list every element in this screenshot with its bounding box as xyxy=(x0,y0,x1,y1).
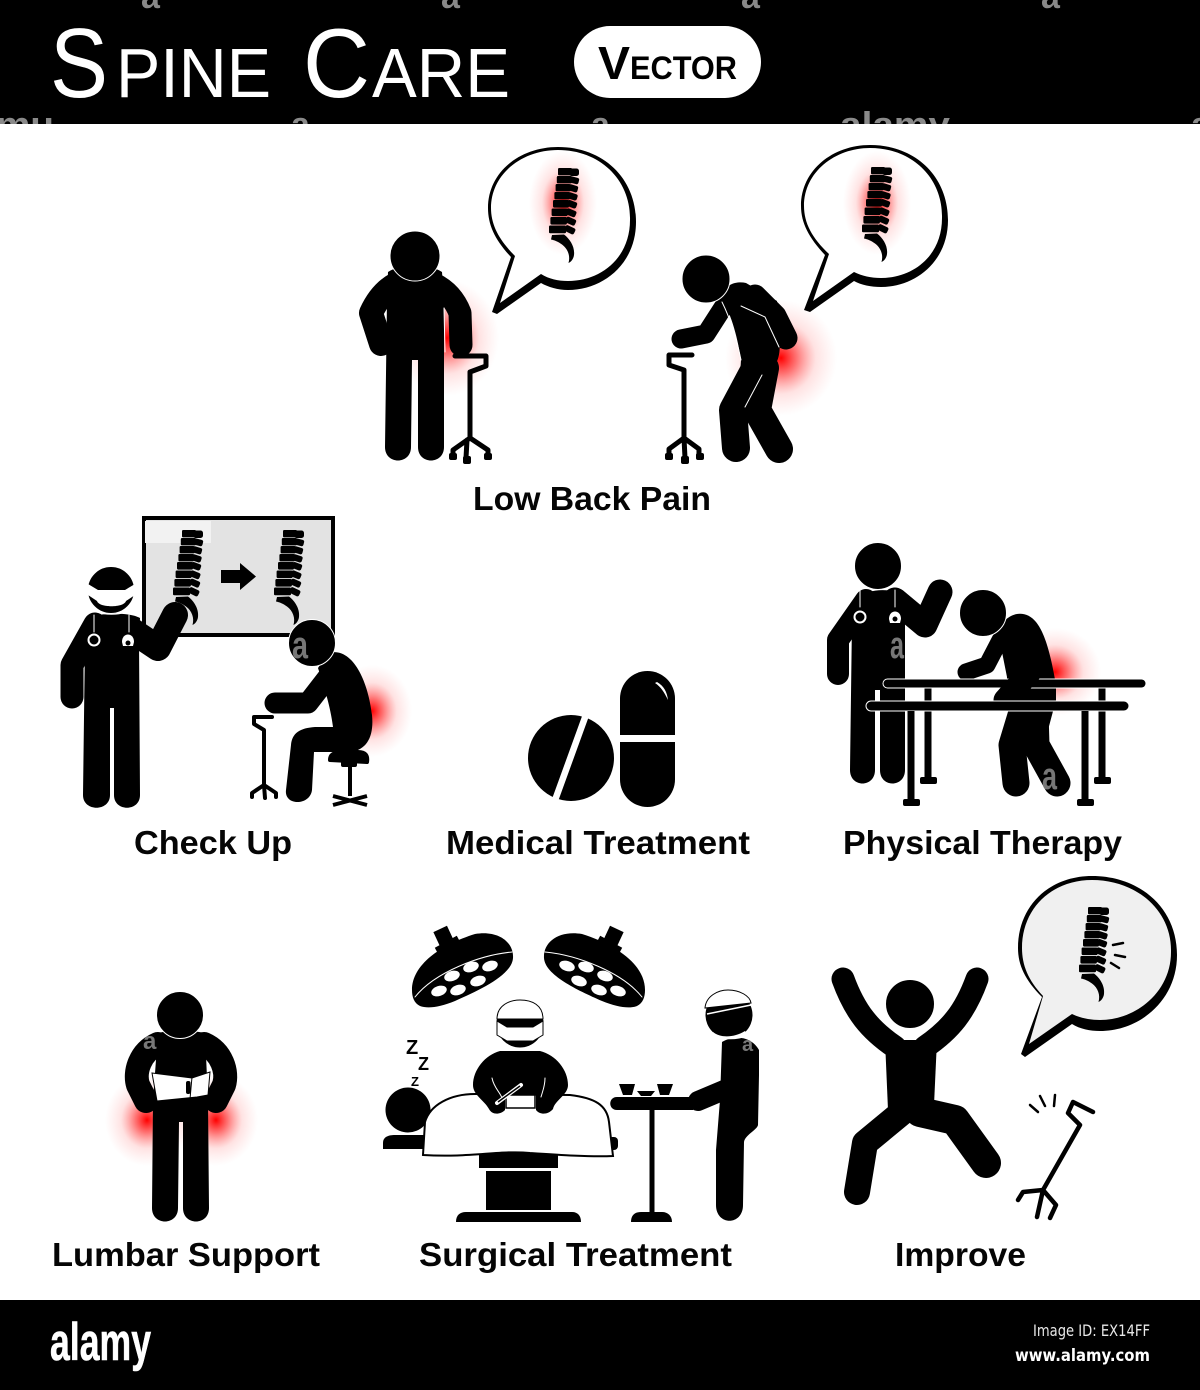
icon: tablet xyxy=(528,712,614,803)
vector badge: V xyxy=(598,37,630,89)
doctor with mask xyxy=(72,566,175,808)
therapist xyxy=(838,542,940,784)
footer band xyxy=(0,1300,1200,1390)
panel: surgical treatment xyxy=(383,926,759,1273)
vector badge: ECTOR xyxy=(630,50,737,86)
label: medical treatment: Medical Treatment xyxy=(446,824,750,861)
logo: alamy xyxy=(50,1313,151,1372)
icon: arrow xyxy=(221,563,256,590)
standing patient with cane xyxy=(371,231,499,464)
bent patient xyxy=(960,590,1101,783)
seated patient: a xyxy=(292,625,309,667)
label: surgical treatment: Surgical Treatment xyxy=(419,1236,732,1273)
speech bubble: painful spine xyxy=(801,145,948,312)
seated patient xyxy=(252,620,412,805)
title xyxy=(50,8,510,118)
panel: lumbar support xyxy=(52,992,320,1273)
header band xyxy=(0,0,1200,124)
bent patient with cane xyxy=(665,255,837,464)
website: www.alamy.com xyxy=(1015,1346,1150,1366)
figure with lumbar belt: a xyxy=(143,1028,157,1055)
image id: Image ID: EX14FF xyxy=(1033,1321,1150,1340)
panel: check up xyxy=(72,518,412,861)
header band: alamy xyxy=(840,106,950,144)
panel: medical treatment xyxy=(446,671,750,861)
title: ARE xyxy=(372,34,510,112)
nurse: a xyxy=(742,1034,754,1056)
speech bubble: painful spine xyxy=(488,147,636,314)
label: physical therapy: Physical Therapy xyxy=(843,824,1123,861)
cane xyxy=(252,717,276,798)
icon: capsule xyxy=(618,671,677,807)
label: improve: Improve xyxy=(895,1236,1026,1273)
operating table xyxy=(456,1137,618,1222)
panel: low back pain xyxy=(371,145,948,517)
discarded cane xyxy=(1018,1095,1093,1218)
instrument table xyxy=(610,1084,693,1222)
vector badge xyxy=(574,26,761,98)
header band: a xyxy=(591,106,611,144)
therapist: a xyxy=(890,625,905,667)
jumping figure xyxy=(843,979,986,1192)
title: C xyxy=(303,8,370,118)
panel: improve xyxy=(843,876,1177,1273)
speech bubble: healed spine xyxy=(1018,876,1177,1057)
surgical drape xyxy=(423,1094,613,1156)
surgeon xyxy=(473,1000,568,1114)
belt xyxy=(152,1072,210,1101)
parallel bars xyxy=(866,640,1146,806)
surgical lamp right xyxy=(544,926,645,1007)
stool xyxy=(330,752,367,805)
header band: a xyxy=(291,106,311,144)
figure with lumbar belt xyxy=(137,992,225,1222)
label: check up: Check Up xyxy=(134,824,292,861)
nurse xyxy=(698,990,759,1221)
sleeping patient: Z xyxy=(406,1037,418,1059)
glow: hips xyxy=(105,1074,258,1166)
label: lumbar support: Lumbar Support xyxy=(52,1236,320,1273)
panel: physical therapy xyxy=(838,542,1146,861)
panel: physical therapy: a xyxy=(1042,756,1058,798)
sleeping patient xyxy=(383,1037,430,1149)
surgical lamp left xyxy=(412,926,513,1007)
sleeping patient: Z xyxy=(411,1074,419,1089)
label: low back pain: Low Back Pain xyxy=(473,480,711,517)
x-ray board xyxy=(144,518,333,635)
title: S xyxy=(50,8,108,118)
sleeping patient: Z xyxy=(418,1054,429,1074)
title: PINE xyxy=(116,34,271,112)
